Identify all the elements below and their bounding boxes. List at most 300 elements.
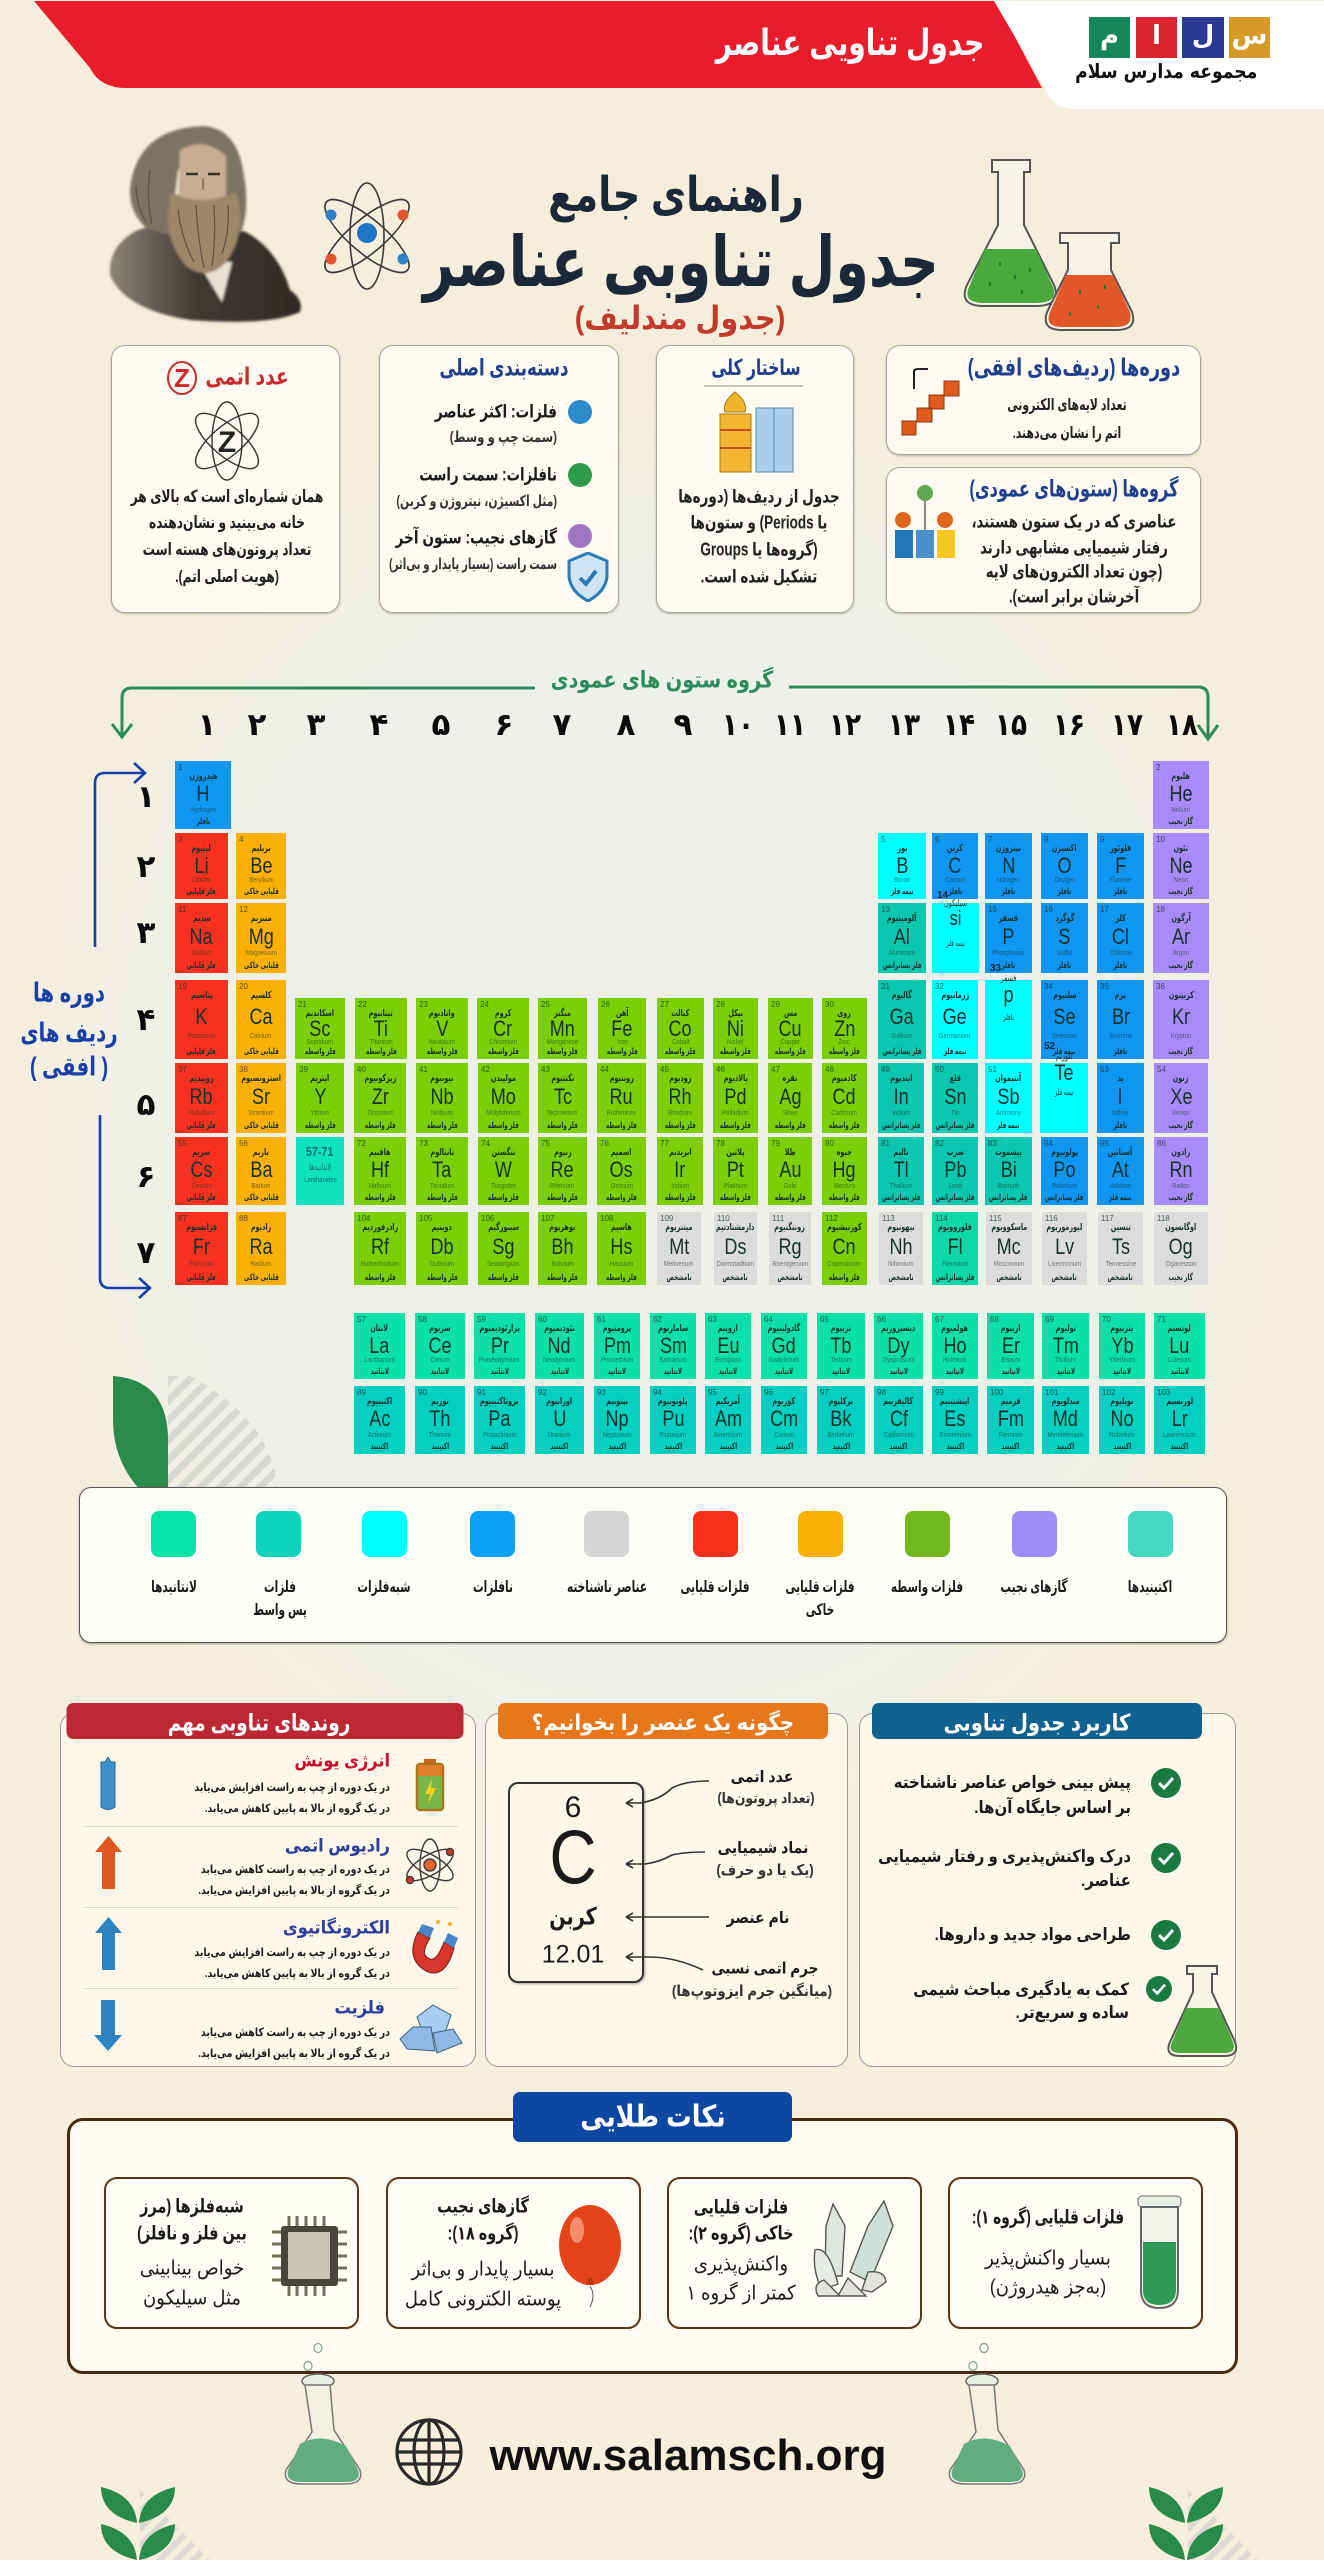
Y: Y: [314, 1084, 326, 1109]
panel: periodic trends: در یک گروه از بالا به پایین کاهش می‌یابد.: [205, 1968, 390, 1980]
Mt: میتنریوم: [665, 1222, 693, 1233]
Bh: Bh: [551, 1234, 574, 1259]
Co: فلز واسطه: [665, 1046, 696, 1056]
panel: how to read an element: کربن: [549, 1904, 597, 1930]
Al: 13: [881, 905, 890, 914]
panel: general structure: (گروه‌ها یا Groups: [700, 540, 818, 560]
Ar: Argon: [1173, 948, 1189, 957]
lanthanides placeholder: 57-71: [306, 1144, 334, 1159]
F: نافلز: [1114, 886, 1127, 896]
Rg: Rg: [778, 1234, 802, 1259]
As (labelled p): ناقلز: [1003, 1012, 1014, 1022]
Na: فلز قلیایی: [187, 960, 216, 970]
Fe: فلز واسطه: [607, 1046, 637, 1056]
icon: blue down arrow: [94, 2000, 122, 2051]
Bh: بوهریوم: [549, 1222, 576, 1233]
Cn: 112: [825, 1214, 838, 1223]
Kr: گاز نجیب: [1169, 1046, 1193, 1056]
N: [985, 833, 1032, 899]
As (labelled p): [985, 980, 1032, 1059]
Ar: گاز نجیب: [1169, 960, 1193, 970]
Cf: [874, 1386, 923, 1454]
Fr: Francium: [189, 1259, 214, 1268]
Sb: [985, 1063, 1032, 1133]
row numbers and period arrows: ( افقی ): [30, 1052, 108, 1082]
Sb: آنتیموان: [995, 1073, 1022, 1084]
icon: crystals: [811, 2200, 897, 2300]
S: S: [1058, 924, 1071, 949]
Re: Rhenium: [550, 1181, 574, 1190]
trend: atomic radius: رادیوس اتمی: [285, 1836, 390, 1856]
Ti: فلز واسطه: [366, 1046, 396, 1056]
Bi: بیسموت: [995, 1147, 1022, 1158]
Ag: 47: [771, 1065, 780, 1074]
icon: staircase: [902, 368, 960, 436]
Na: Sodium: [191, 948, 212, 957]
Th: 90: [418, 1388, 427, 1397]
Bk: [817, 1386, 865, 1454]
Pa: Protactinium: [483, 1430, 516, 1439]
Ni: نیکل: [728, 1008, 743, 1019]
Al: آلومینیوم: [887, 913, 917, 924]
Fl: Fl: [947, 1234, 963, 1259]
Hf: فلز واسطه: [365, 1192, 395, 1202]
Ge: ژرمانیوم: [941, 990, 969, 1001]
Rb: فلز قلیایی: [187, 1120, 216, 1130]
Mt: Meitnerium: [664, 1259, 694, 1268]
Bk: Berkelium: [828, 1430, 854, 1439]
Bk: Bk: [830, 1406, 852, 1431]
No: 102: [1102, 1388, 1115, 1397]
panel: golden tips: گازهای نجیب: [437, 2196, 529, 2218]
header: uses: [872, 1703, 1202, 1739]
Mc: Moscovium: [994, 1259, 1024, 1268]
website url: www.salamsch.org: [490, 2431, 886, 2480]
column numbers 1-18: ۹: [674, 707, 692, 742]
Md: 101: [1045, 1388, 1058, 1397]
Sg: فلز واسطه: [488, 1272, 519, 1282]
Zn: 30: [825, 1000, 834, 1009]
Th: Th: [429, 1406, 451, 1431]
Hf: هافنیم: [369, 1147, 391, 1158]
Md: Md: [1053, 1406, 1078, 1431]
Hg: Mercury: [834, 1181, 855, 1190]
panel: golden tips: مثل سیلیکون: [143, 2288, 241, 2310]
Li: لیتیوم: [192, 843, 211, 854]
S: Sulfur: [1057, 948, 1072, 957]
Se: سلنیوم: [1053, 990, 1076, 1001]
Fm: اکتینید: [1002, 1441, 1019, 1451]
heading: structure: ساختار کلی: [711, 355, 801, 380]
Pu: 94: [653, 1388, 662, 1397]
Li: 3: [178, 835, 182, 844]
I: [1097, 1063, 1144, 1133]
Po: فلز پساترانس: [1045, 1192, 1084, 1202]
Ce: Ce: [428, 1333, 452, 1358]
No: اکتینید: [1113, 1441, 1131, 1451]
Mc: نامشخص: [996, 1272, 1022, 1282]
Br: 35: [1100, 982, 1109, 991]
Bh: Bohrium: [551, 1259, 574, 1268]
trend: metallic character: فلزیت: [334, 1998, 385, 2018]
Ne: Ne: [1169, 853, 1193, 878]
Ir: 77: [660, 1139, 669, 1148]
Pd: فلز واسطه: [720, 1120, 751, 1130]
Li: [175, 833, 228, 899]
logo: school group: ا: [1152, 21, 1161, 51]
legend panel: شبه‌فلزات: [357, 1579, 411, 1596]
panel: uses of the periodic table: [859, 1703, 1238, 2067]
V: وانادیوم: [429, 1008, 455, 1019]
Hg: جیوه: [837, 1147, 852, 1158]
Hs: 108: [600, 1214, 613, 1223]
Sc: فلز واسطه: [305, 1046, 335, 1056]
Lr: Lawrencium: [1163, 1430, 1196, 1439]
text: periods description: تعداد لایه‌های الکترونی: [1007, 397, 1127, 414]
Se: نیمه فلز: [1053, 1046, 1076, 1056]
Mn: فلز واسطه: [547, 1046, 578, 1056]
panel: uses of the periodic table: درک واکنش‌پذیری و رفتار شیمیایی: [878, 1847, 1131, 1866]
Hs: Hs: [610, 1234, 633, 1259]
Rn: Radon: [1172, 1181, 1190, 1190]
Ds: 110: [717, 1214, 730, 1223]
column numbers 1-18: ۳: [307, 707, 325, 742]
Tl: [878, 1137, 924, 1205]
panel: periodic trends: روندهای تناوبی مهم: [168, 1710, 350, 1736]
Nh: Nihonium: [888, 1259, 914, 1268]
row numbers and period arrows: ۴: [137, 1002, 155, 1037]
Lr: Lr: [1171, 1406, 1188, 1431]
Ho: لانتانید: [946, 1366, 964, 1376]
Rn: Rn: [1169, 1157, 1193, 1182]
As (labelled p): p: [1003, 982, 1014, 1007]
Cl: Chlorine: [1109, 948, 1132, 957]
V: [416, 998, 468, 1059]
Gd: [761, 1313, 807, 1379]
Tl: Tl: [893, 1157, 909, 1182]
Sm: ساماریوم: [658, 1323, 688, 1334]
Se: Selenium: [1052, 1031, 1077, 1040]
No: No: [1110, 1406, 1134, 1431]
Ta: [416, 1137, 468, 1205]
Bk: 97: [820, 1388, 829, 1397]
Sg: Sg: [492, 1234, 515, 1259]
Tb: Tb: [830, 1333, 852, 1358]
Cs: Cesium: [191, 1181, 212, 1190]
Rb: [175, 1063, 228, 1133]
Zr: [354, 1063, 406, 1133]
Bh: فلز واسطه: [547, 1272, 578, 1282]
Co: [657, 998, 704, 1059]
Pr: 59: [477, 1315, 486, 1324]
icon: left footer flask: [280, 2370, 366, 2492]
panel: uses of the periodic table: پیش بینی خواص عناصر ناشناخته: [894, 1773, 1131, 1792]
Ta: 73: [419, 1139, 428, 1148]
Np: Neptunium: [602, 1430, 632, 1439]
Au: 79: [771, 1139, 780, 1148]
Ru: [597, 1063, 646, 1133]
La: لانتان: [371, 1323, 388, 1334]
use 2: [1151, 1843, 1181, 1873]
Be: 4: [239, 835, 243, 844]
panel: periodic trends: در یک دوره از چپ به راست کاهش می‌یابد: [201, 2027, 390, 2039]
No: [1099, 1386, 1145, 1454]
title line 1: راهنمای جامع: [548, 169, 804, 222]
Zn: [822, 998, 867, 1059]
Rn: 86: [1157, 1139, 1166, 1148]
panel: golden tips: خاکی (گروه ۲):: [689, 2224, 793, 2244]
Am: اکتینید: [719, 1441, 737, 1451]
Pr: Pr: [490, 1333, 509, 1358]
icon: globe: [394, 2416, 464, 2488]
Es: 99: [935, 1388, 944, 1397]
H: نافلز: [196, 816, 210, 826]
Fm: 100: [990, 1388, 1003, 1397]
Es: اینشتینیم: [940, 1396, 970, 1407]
Ni: 28: [716, 1000, 725, 1009]
panel: golden tips: پوسته الکترونی کامل: [405, 2288, 561, 2310]
tip 2 card: alkaline earth metals: [667, 2177, 922, 2329]
Bi: Bi: [1000, 1157, 1017, 1182]
Cn: کورنیشیوم: [827, 1222, 862, 1233]
He: Helium: [1172, 805, 1190, 814]
Fl: Flerovium: [942, 1259, 968, 1268]
Ac: اکتینیوم: [367, 1396, 392, 1407]
Db: دوبنیم: [432, 1222, 452, 1233]
Mg: قلیایی خاکی: [244, 960, 278, 970]
legend panel: فلزات واسطه: [891, 1579, 963, 1596]
use 3: [1151, 1920, 1181, 1950]
column numbers 1-18: ۱۸: [1166, 707, 1198, 742]
column numbers 1-18: ۵: [432, 707, 450, 742]
Te: Te: [1054, 1060, 1074, 1085]
header: how to read: [498, 1703, 828, 1739]
Og: اوگانسون: [1166, 1222, 1196, 1233]
Se: [1041, 980, 1088, 1059]
Mo: فلز واسطه: [488, 1120, 519, 1130]
Fl: 114: [935, 1214, 948, 1223]
icon: orange up arrow: [95, 1836, 122, 1889]
panel: how to read an element: چگونه یک عنصر را بخوانیم؟: [532, 1710, 794, 1735]
row numbers and period arrows: ۵: [137, 1087, 155, 1122]
Mc: Mc: [997, 1234, 1021, 1259]
Sr: قلیایی خاکی: [244, 1120, 278, 1130]
Th: اکتینید: [431, 1441, 449, 1451]
lanthanides placeholder: لانتانیدها: [309, 1162, 331, 1172]
C: Carbon: [945, 875, 965, 884]
Ga: فلز پساترانس: [883, 1046, 921, 1056]
Br: نافلز: [1114, 1046, 1127, 1056]
panel: periodic trends: در یک گروه از بالا به پایین افزایش می‌یابد.: [198, 1885, 390, 1897]
column numbers 1-18: ۱۰: [722, 707, 754, 742]
Pm: Promethium: [601, 1355, 633, 1364]
tip 3 card: noble gases: [386, 2177, 641, 2329]
panel: uses of the periodic table: عناصر.: [1081, 1871, 1131, 1890]
Ru: 44: [600, 1065, 609, 1074]
Sn: قلع: [949, 1073, 961, 1084]
Cr: فلز واسطه: [488, 1046, 518, 1056]
F: [1097, 833, 1144, 899]
Pa: [474, 1386, 525, 1454]
row numbers and period arrows: ۳: [137, 915, 155, 950]
Sn: [932, 1063, 978, 1133]
Y: Yttrium: [310, 1108, 329, 1117]
Tm: Tm: [1052, 1333, 1079, 1358]
panel: groups: رفتار شیمیایی مشابهی دارند: [980, 538, 1168, 558]
periodic table main grid: 52: [1044, 1041, 1055, 1052]
Al: فلز پساترانس: [883, 960, 921, 970]
icon: Z badge: Z: [174, 363, 190, 393]
Bi: Bismuth: [998, 1181, 1019, 1190]
Pm: Pm: [603, 1333, 631, 1358]
panel: how to read an element: C: [549, 1816, 597, 1900]
Ga: 31: [881, 982, 890, 991]
Po: Po: [1053, 1157, 1076, 1182]
B: B: [896, 853, 908, 878]
Y: فلز واسطه: [305, 1120, 335, 1130]
Er: 68: [990, 1315, 999, 1324]
Lu: لوتسیم: [1168, 1323, 1191, 1334]
panel: how to read an element: (تعداد پروتون‌ها): [718, 1791, 814, 1807]
Pa: 91: [477, 1388, 486, 1397]
Ru: Ru: [610, 1084, 633, 1109]
tip 1 card: alkali metals: [948, 2177, 1203, 2329]
B: Boron: [894, 875, 910, 884]
Lr: 103: [1157, 1388, 1170, 1397]
Be: قلیایی خاکی: [244, 886, 278, 896]
Md: Mendelevium: [1048, 1430, 1083, 1439]
Sg: 106: [481, 1214, 494, 1223]
Xe: گاز نجیب: [1169, 1120, 1193, 1130]
panel: uses of the periodic table: طراحی مواد جدید و داروها.: [935, 1925, 1131, 1944]
Sr: Sr: [252, 1084, 270, 1109]
Na: Na: [190, 924, 213, 949]
Eu: 63: [708, 1315, 717, 1324]
Cu: Copper: [781, 1037, 800, 1046]
Og: 118: [1157, 1214, 1170, 1223]
Cf: اکتینید: [890, 1441, 907, 1451]
Dy: Dysprosium: [883, 1355, 914, 1364]
swatch: alkali metals: [693, 1511, 738, 1557]
Fr: فلز قلیایی: [187, 1272, 216, 1282]
swatch: alkaline earth: [798, 1511, 843, 1557]
panel: atomic number: (هویت اصلی اتم).: [175, 567, 279, 586]
Nd: Nd: [548, 1333, 571, 1358]
icon: blue up arrow: [95, 1917, 122, 1970]
text: metals: فلزات: اکثر عناصر: [435, 402, 557, 422]
column numbers 1-18: ۱: [198, 707, 216, 742]
Hf: Hf: [371, 1157, 389, 1182]
swatch: noble gases: [1012, 1511, 1057, 1557]
Mc: 115: [989, 1214, 1002, 1223]
Tc: Tc: [553, 1084, 572, 1109]
Mn: 25: [541, 1000, 550, 1009]
panel: periodic trends: در یک دوره از چپ به راست کاهش می‌یابد: [201, 1864, 390, 1876]
Rg: نامشخص: [777, 1272, 803, 1282]
Mo: Molybdenum: [486, 1108, 521, 1117]
Dy: [874, 1313, 923, 1379]
panel: main classification: (سمت چپ و وسط): [450, 429, 557, 446]
Tb: Terbium: [830, 1355, 852, 1364]
Ts: Ts: [1111, 1234, 1130, 1259]
Nb: Nb: [430, 1084, 454, 1109]
Nb: [416, 1063, 468, 1133]
row numbers and period arrows: ۱: [137, 779, 155, 814]
Er: اربیوم: [1001, 1323, 1020, 1334]
Cn: فلز واسطه: [829, 1272, 860, 1282]
Tm: لانتانید: [1056, 1366, 1075, 1376]
In: فلز پساترانس: [882, 1120, 920, 1130]
Lv: Lv: [1055, 1234, 1074, 1259]
Mo: مولیبدن: [491, 1073, 516, 1084]
Rf: Rf: [371, 1234, 389, 1259]
No: Nobelium: [1109, 1430, 1135, 1439]
Co: Cobalt: [672, 1037, 689, 1046]
Og: [1154, 1212, 1208, 1285]
panel: how to read an element: 12.01: [542, 1940, 604, 1968]
Ce: Cerium: [430, 1355, 450, 1364]
Mn: Mn: [550, 1016, 575, 1041]
Ag: Silver: [782, 1108, 797, 1117]
Ds: Ds: [724, 1234, 747, 1259]
column numbers 1-18: ۷: [553, 707, 571, 742]
Po: 84: [1044, 1139, 1053, 1148]
Pd: 46: [716, 1065, 725, 1074]
Os: فلز واسطه: [606, 1192, 637, 1202]
Os: 76: [600, 1139, 609, 1148]
Kr: Kr: [1172, 1004, 1190, 1029]
Zn: Zn: [834, 1016, 855, 1041]
Zr: Zirconium: [367, 1108, 393, 1117]
Pd: [713, 1063, 758, 1133]
Pt: فلز واسطه: [720, 1192, 751, 1202]
Re: [538, 1137, 587, 1205]
Mn: منگنز: [554, 1008, 571, 1019]
Ag: نقره: [783, 1073, 797, 1084]
swatch: post-transition metals: [256, 1511, 301, 1557]
In: [878, 1063, 924, 1133]
Sn: Sn: [944, 1084, 966, 1109]
Pb: Lead: [948, 1181, 962, 1190]
Dy: 66: [877, 1315, 886, 1324]
arrow: group bracket: [110, 686, 1220, 742]
Ru: Ruthenium: [607, 1108, 636, 1117]
Tl: 81: [881, 1139, 890, 1148]
Rh: Rhodium: [668, 1108, 692, 1117]
Cl: کلر: [1115, 913, 1126, 924]
K: پتاسیم: [191, 990, 212, 1001]
Hs: فلز واسطه: [606, 1272, 637, 1282]
Rh: [657, 1063, 703, 1133]
column numbers 1-18: ۱۵: [995, 707, 1027, 742]
V: فلز واسطه: [427, 1046, 457, 1056]
logo: school group: مجموعه مدارس سلام: [1075, 59, 1257, 83]
Pd: Palladium: [722, 1108, 749, 1117]
Md: [1042, 1386, 1089, 1454]
N: نیتروژن: [996, 843, 1021, 854]
Rg: رونتگنیوم: [775, 1222, 805, 1233]
Th: [415, 1386, 465, 1454]
legend panel: فلزات: [264, 1579, 296, 1596]
Lv: لیورموریوم: [1047, 1222, 1082, 1233]
P: [985, 903, 1032, 973]
Cm: [761, 1386, 807, 1454]
Kr: [1153, 980, 1209, 1059]
Dy: Dy: [887, 1333, 910, 1358]
N: 7: [988, 835, 992, 844]
panel: atomic number: [110, 345, 341, 615]
logo: school group: ل: [1192, 21, 1214, 51]
